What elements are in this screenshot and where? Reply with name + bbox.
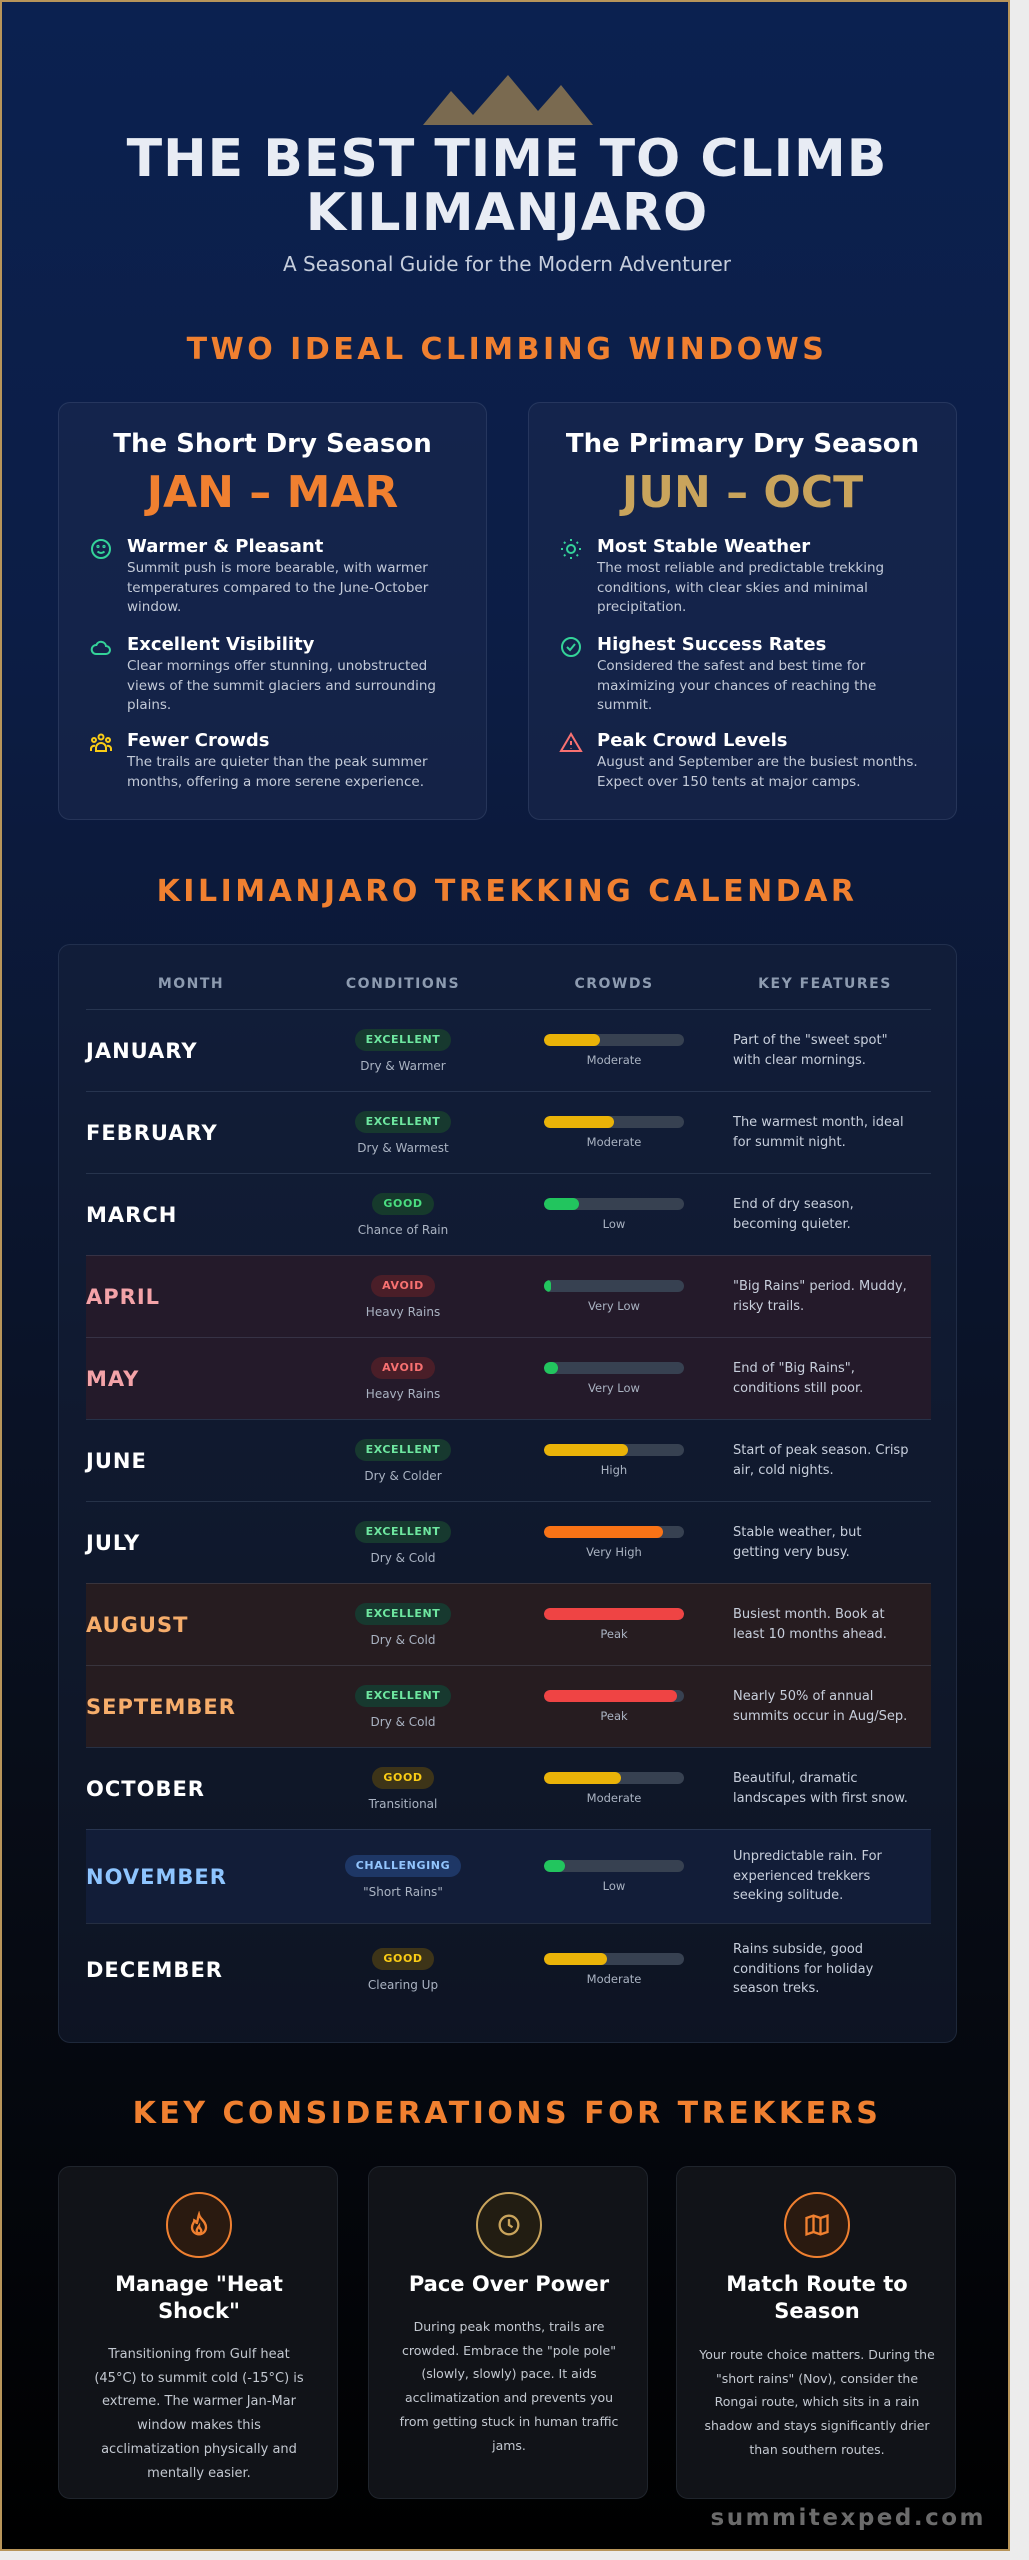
table header: KEY FEATURES	[758, 976, 892, 992]
title: Manage "Heat	[115, 2272, 283, 2296]
row: march: Low	[603, 1217, 625, 1231]
text: Transitioning from Gulf heat (45°C) to summit cold (-15°C) is extreme. The warmer Jan-Mar window makes this acclimatization physically and mentally easier.	[94, 2347, 304, 2481]
panel: primary dry season	[528, 402, 957, 820]
footer: website: summitexped.com	[711, 2505, 986, 2531]
row: august: Peak	[600, 1627, 628, 1641]
text: During peak months, trails are crowded. Embrace the "pole pole" (slowly, slowly) pace. It aids acclimatization and prevents you from getting stuck in human traffic jams.	[400, 2319, 618, 2453]
row: february: The warmest month, ideal for summit night.	[733, 1115, 904, 1150]
row: may	[86, 1337, 931, 1419]
title: KILIMANJARO	[306, 183, 708, 243]
row: august: AUGUST	[86, 1612, 188, 1636]
item: crowds	[90, 730, 428, 790]
row: september	[86, 1665, 931, 1747]
range: JAN – MAR	[147, 467, 398, 518]
row: october: Beautiful, dramatic landscapes with first snow.	[733, 1771, 908, 1806]
item: visibility: Excellent Visibility	[127, 634, 314, 655]
row: april	[86, 1255, 931, 1337]
row: october: Transitional	[369, 1796, 437, 1810]
row: april: AVOID	[382, 1278, 424, 1292]
title: Match Route to	[726, 2272, 908, 2296]
item: crowds: The trails are quieter than the peak summer months, offering a more serene experience.	[127, 754, 428, 790]
row: june: JUNE	[86, 1448, 147, 1472]
card title: The Primary Dry Season	[566, 429, 919, 459]
item: peak crowds: August and September are the busiest months. Expect over 150 tents at major camps.	[597, 754, 918, 790]
row: september: SEPTEMBER	[86, 1694, 236, 1718]
row: august: Dry & Cold	[371, 1632, 435, 1646]
row: october: Moderate	[587, 1791, 641, 1805]
row: february: Dry & Warmest	[357, 1140, 449, 1154]
row: october: OCTOBER	[86, 1776, 205, 1800]
item: visibility	[90, 634, 436, 713]
row: november: Low	[603, 1879, 625, 1893]
row: august	[86, 1583, 931, 1665]
item: warmer	[91, 536, 428, 615]
title: Shock"	[158, 2299, 240, 2323]
row: july: EXCELLENT	[366, 1524, 440, 1538]
icon: flame	[166, 2192, 232, 2258]
icon: clock	[476, 2192, 542, 2258]
item: crowds: Fewer Crowds	[127, 730, 269, 751]
row: december: Clearing Up	[368, 1978, 438, 1992]
row: february: EXCELLENT	[366, 1114, 440, 1128]
row: january: JANUARY	[86, 1038, 198, 1062]
row: april: "Big Rains" period. Muddy, risky trails.	[733, 1279, 907, 1314]
row: may: Heavy Rains	[366, 1386, 440, 1400]
table header: MONTH	[158, 976, 224, 992]
panel: pace	[368, 2166, 648, 2499]
item: peak crowds	[559, 730, 918, 790]
subtitle: A Seasonal Guide for the Modern Adventurer	[283, 252, 731, 276]
row: february: FEBRUARY	[86, 1120, 218, 1144]
text: Your route choice matters. During the "short rains" (Nov), consider the Rongai route, which sits in a rain shadow and stays significantly drier than southern routes.	[699, 2347, 935, 2457]
icon: map	[784, 2192, 850, 2258]
row: november: "Short Rains"	[363, 1884, 443, 1898]
row: september: Nearly 50% of annual summits occur in Aug/Sep.	[733, 1689, 907, 1724]
row: july: Stable weather, but getting very busy.	[733, 1525, 861, 1560]
row: april: Very Low	[588, 1299, 640, 1313]
item: stable: Most Stable Weather	[597, 536, 810, 557]
row: january: Dry & Warmer	[360, 1058, 446, 1072]
row: june: High	[601, 1463, 627, 1477]
title	[126, 129, 887, 243]
panel: short dry season	[58, 402, 487, 820]
card title: The Short Dry Season	[113, 429, 432, 459]
title	[115, 2272, 283, 2323]
panel: calendar table	[58, 944, 957, 2043]
row: november: Unpredictable rain. For experienced trekkers seeking solitude.	[733, 1849, 882, 1903]
row: october	[86, 1747, 931, 1829]
table header: CROWDS	[574, 976, 654, 992]
item: visibility: Clear mornings offer stunning, unobstructed views of the summit glaciers and surrounding plains.	[127, 658, 436, 713]
row: july: Dry & Cold	[371, 1550, 435, 1564]
row: march: End of dry season, becoming quieter.	[733, 1197, 854, 1232]
row: october: GOOD	[383, 1770, 423, 1784]
row: may: AVOID	[382, 1360, 424, 1374]
item: success: Highest Success Rates	[597, 634, 826, 655]
row: july: Very High	[586, 1545, 642, 1559]
row: june: Dry & Colder	[364, 1468, 442, 1482]
row: november: CHALLENGING	[356, 1858, 450, 1872]
row: july	[86, 1501, 931, 1583]
row: august: EXCELLENT	[366, 1606, 440, 1620]
row: september: EXCELLENT	[366, 1688, 440, 1702]
row: june: Start of peak season. Crisp air, cold nights.	[733, 1443, 908, 1478]
row: december: Moderate	[587, 1972, 641, 1986]
title: Season	[774, 2299, 860, 2323]
row: january: EXCELLENT	[366, 1032, 440, 1046]
row: november	[86, 1829, 931, 1923]
row: september: Dry & Cold	[371, 1714, 435, 1728]
item: warmer: Summit push is more bearable, with warmer temperatures compared to the June-October window.	[127, 560, 428, 615]
title: Pace Over Power	[409, 2272, 609, 2296]
row: april: Heavy Rains	[366, 1304, 440, 1318]
row: february: Moderate	[587, 1135, 641, 1149]
table header	[158, 976, 892, 992]
heading: two windows: TWO IDEAL CLIMBING WINDOWS	[187, 332, 827, 367]
row: july: JULY	[86, 1530, 140, 1554]
row: january: Part of the "sweet spot" with clear mornings.	[733, 1033, 888, 1068]
range: JUN – OCT	[622, 467, 863, 518]
row: august: Busiest month. Book at least 10 months ahead.	[733, 1607, 887, 1642]
row: march: MARCH	[86, 1202, 177, 1226]
icon: mountain	[423, 75, 593, 125]
row: june	[86, 1419, 931, 1501]
row: april: APRIL	[86, 1284, 160, 1308]
item: success	[561, 634, 876, 713]
row: february	[86, 1091, 931, 1173]
item: stable	[561, 536, 884, 615]
row: january	[86, 1009, 931, 1091]
row: september: Peak	[600, 1709, 628, 1723]
item: warmer: Warmer & Pleasant	[127, 536, 323, 557]
row: december: GOOD	[383, 1952, 423, 1964]
row: january: Moderate	[587, 1053, 641, 1067]
row: june: EXCELLENT	[366, 1442, 440, 1456]
row: may: MAY	[86, 1366, 139, 1390]
item: peak crowds: Peak Crowd Levels	[597, 730, 788, 751]
heading: calendar: KILIMANJARO TREKKING CALENDAR	[157, 874, 857, 909]
row: march: Chance of Rain	[358, 1222, 448, 1236]
title: THE BEST TIME TO CLIMB	[127, 129, 887, 189]
row: march: GOOD	[383, 1196, 423, 1210]
row: december	[86, 1923, 931, 2015]
table header: CONDITIONS	[346, 976, 460, 992]
heading: key considerations: KEY CONSIDERATIONS FOR TREKKERS	[133, 2096, 881, 2131]
panel: heat shock	[58, 2166, 338, 2499]
row: march	[86, 1173, 931, 1255]
row: november: NOVEMBER	[86, 1864, 227, 1888]
row: may: Very Low	[588, 1381, 640, 1395]
row: december: DECEMBER	[86, 1958, 223, 1982]
item: success: Considered the safest and best time for maximizing your chances of reaching the summit.	[597, 658, 876, 713]
row: december: Rains subside, good conditions for holiday season treks.	[733, 1942, 873, 1996]
panel: route	[676, 2166, 956, 2499]
row: may: End of "Big Rains", conditions still poor.	[733, 1361, 863, 1396]
item: stable: The most reliable and predictable trekking conditions, with clear skies and minimal precipitation.	[597, 560, 884, 615]
title	[726, 2272, 908, 2323]
